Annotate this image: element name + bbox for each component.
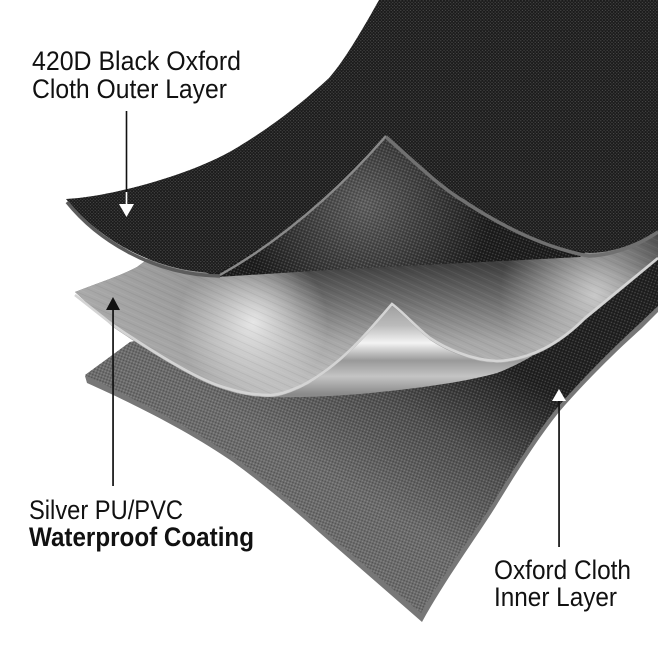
label: inner layer: Oxford Cloth <box>494 555 631 585</box>
silver main face <box>75 222 658 397</box>
silver waterproof coating layer <box>75 222 658 397</box>
arrow: silver coating <box>106 297 120 486</box>
label: outer layer: 420D Black Oxford <box>32 46 241 76</box>
outer black face <box>66 0 658 273</box>
label: outer layer: Cloth Outer Layer <box>32 74 227 104</box>
outer black oxford cloth layer <box>66 0 658 277</box>
silver flap underside <box>262 306 532 397</box>
label: inner layer <box>494 555 631 612</box>
label: silver coating <box>29 495 254 552</box>
black layer lower edge <box>67 202 220 276</box>
label: outer layer <box>32 46 241 104</box>
label: inner layer: Inner Layer <box>494 582 617 612</box>
flap fold edge <box>220 136 386 275</box>
inner oxford cloth layer <box>85 250 658 622</box>
label: silver coating: Silver PU/PVC <box>29 495 183 525</box>
label: silver coating: Waterproof Coating <box>29 522 254 552</box>
silver fold highlight <box>75 258 658 395</box>
arrow: outer layer <box>119 111 134 217</box>
flap underside woven <box>205 125 600 277</box>
arrow: inner layer <box>552 389 566 547</box>
